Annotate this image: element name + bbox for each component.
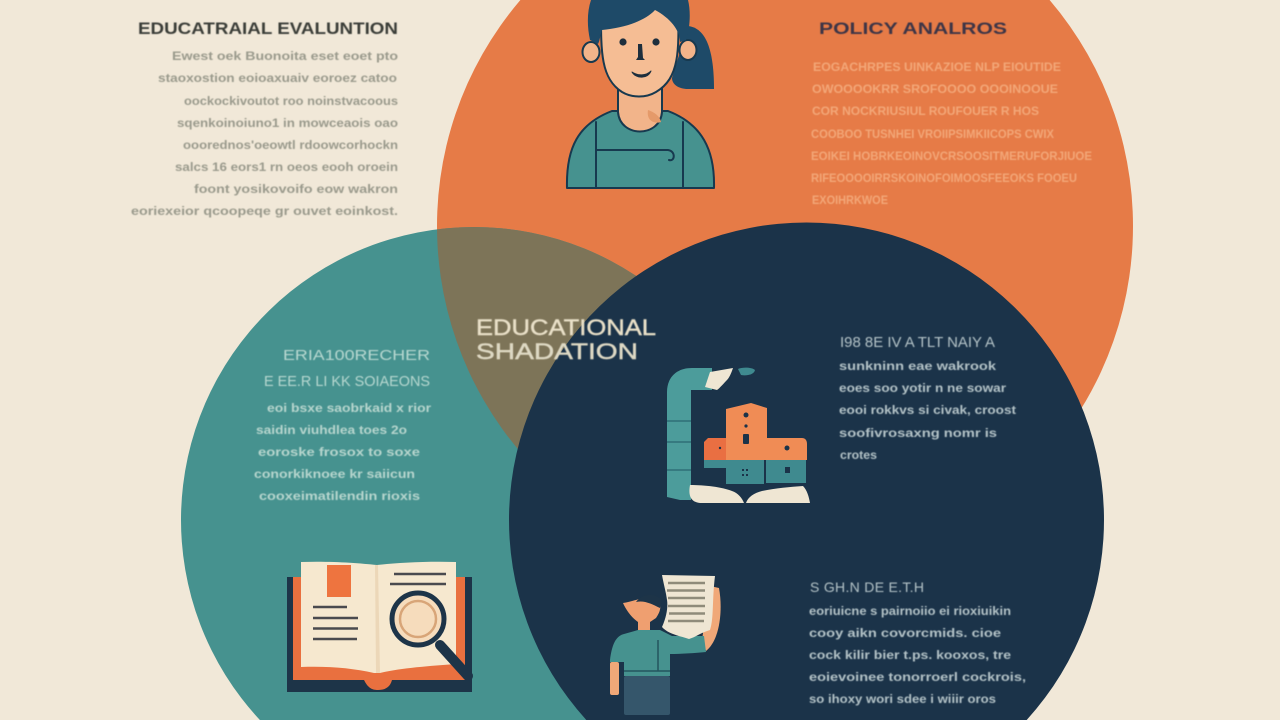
text block: navy circle upper: eoes soo yotir n ne sowar — [839, 381, 1006, 395]
bookmark — [327, 565, 351, 597]
text block: navy circle lower: S GH.N DE E.T.H — [810, 579, 924, 595]
text block: policy analysis body: EOIKEI HOBRKEOINOVCRSOOSITMERUFORJIUOE — [811, 149, 1092, 163]
teal blocks — [704, 460, 726, 468]
text block: policy analysis body: EXOIHRKWOE — [812, 193, 888, 207]
text block: educational evaluation body: foont yosikovoifo eow wakron — [194, 182, 398, 196]
woman facial features — [619, 38, 660, 77]
teal circle body: saidin viuhdlea toes 2o — [256, 423, 407, 437]
panel: teal research circle — [181, 227, 767, 720]
text block: navy circle lower: cock kilir bier t.ps. kooxos, tre — [809, 648, 1011, 662]
title: educational shadation overlap label: SHADATION — [476, 339, 638, 364]
magnifier lens — [392, 593, 444, 645]
text block: policy analysis body: RIFEOOOOIRRSKOINOFOIMOOSFEEOKS FOOEU — [811, 171, 1077, 185]
text block: educational evaluation body: oockockivoutot roo noinstvacoous — [184, 94, 398, 108]
orange blocks — [726, 403, 767, 460]
person left arm — [610, 662, 619, 695]
text block: navy circle lower: eoriuicne s pairnoiio ei rioxiuikin — [809, 604, 1011, 618]
text block: navy circle upper: sunkninn eae wakrook — [839, 359, 996, 373]
open book base — [689, 485, 744, 503]
teal circle body: eoi bsxe saobrkaid x rior — [267, 401, 431, 415]
heading: policy analysis: POLICY ANALROS — [819, 19, 1007, 38]
text block: educational evaluation body: Ewest oek Buonoita eset eoet pto — [172, 49, 398, 63]
text block: policy analysis body: OWOOOOKRR SROFOOOO OOOINOOUE — [812, 82, 1058, 96]
text block: educational evaluation body: sqenkoinoiuno1 in mowceaois oao — [177, 116, 398, 130]
cream page tip — [705, 368, 733, 390]
icon: woman portrait — [567, 0, 714, 188]
text block: navy circle upper: soofivrosaxng nomr is — [839, 426, 997, 440]
woman ponytail — [672, 26, 714, 89]
magnifier handle — [440, 645, 468, 676]
teal circle body: conorkiknoee kr saiicun — [254, 467, 415, 481]
right page lines — [390, 574, 446, 584]
text block: educational evaluation body: staoxostion eoioaxuaiv eoroez catoo — [158, 71, 397, 85]
woman ears — [582, 42, 600, 62]
book orange inner cover — [293, 577, 465, 690]
text block: navy circle lower — [809, 579, 1026, 706]
book navy cover — [287, 577, 472, 692]
document page — [662, 575, 715, 639]
title: educational shadation overlap label — [476, 315, 656, 364]
woman shirt — [567, 111, 714, 188]
icon: person reading document — [610, 575, 721, 715]
heading: educational evaluation: EDUCATRAIAL EVALUNTION — [138, 19, 398, 38]
text block: policy analysis body: COR NOCKRIUSIUL ROUFOUER R HOS — [812, 104, 1039, 118]
person shirt and arm — [610, 630, 706, 676]
woman hair — [588, 0, 690, 44]
text block: educational evaluation body: eoriexeior qcoopeqe gr ouvet eoinkost. — [131, 204, 398, 218]
panel: navy circle — [509, 222, 1104, 720]
infographic canvas — [131, 0, 1133, 720]
block dots — [719, 412, 790, 476]
left page lines — [313, 607, 358, 639]
person trousers — [624, 676, 670, 715]
woman shirt seams — [596, 122, 683, 188]
icon: stacked blocks and book — [667, 368, 810, 503]
text block: policy analysis body: EOGACHRPES UINKAZIOE NLP EIOUTIDE — [813, 60, 1061, 74]
text block: navy circle lower: cooy aikn covorcmids. cioe — [809, 626, 1001, 640]
text block: navy circle lower: so ihoxy wori sdee i wiiir oros — [809, 692, 996, 706]
teal curved column — [667, 368, 712, 500]
shirt seams — [624, 640, 670, 671]
text block: educational evaluation body — [131, 49, 398, 218]
teal circle body: cooxeimatilendin rioxis — [259, 489, 420, 503]
text block: teal circle research — [254, 347, 431, 503]
text block: educational evaluation body: salcs 16 eors1 rn oeos eooh oroein — [175, 160, 398, 174]
text block: policy analysis body — [811, 60, 1092, 207]
overlap: olive intersection — [437, 227, 636, 449]
text block: navy circle upper: crotes — [840, 448, 877, 462]
book pages — [301, 562, 456, 673]
column separators — [667, 421, 691, 470]
woman neck — [618, 88, 662, 132]
person head — [623, 598, 660, 630]
text block: navy circle upper: eooi rokkvs si civak, croost — [839, 403, 1016, 417]
teal circle body: eoroske frosox to soxe — [258, 445, 420, 459]
title: educational shadation overlap label: EDUCATIONAL — [476, 315, 656, 340]
woman face — [601, 6, 678, 96]
teal circle heading: ERIA100RECHER — [283, 347, 430, 364]
text block: navy circle lower: eoievoinee tonorroerl cockrois, — [809, 670, 1026, 684]
panel: policy analysis orange circle — [437, 0, 1133, 574]
teal circle heading — [264, 347, 430, 390]
text block: navy circle upper: I98 8E IV A TLT NAIY A — [840, 334, 995, 351]
teal circle heading: E EE.R LI KK SOIAEONS — [264, 373, 430, 390]
person arm hand — [702, 586, 721, 651]
document lines — [667, 583, 705, 621]
text block: navy circle upper — [839, 334, 1016, 462]
icon: open book with magnifier — [287, 562, 472, 692]
text block: policy analysis body: COOBOO TUSNHEI VROIIPSIMKIICOPS CWIX — [811, 127, 1054, 141]
teal circle body — [254, 401, 431, 503]
text block: educational evaluation body: ooorednos'oeowtl rdoowcorhockn — [183, 138, 398, 152]
